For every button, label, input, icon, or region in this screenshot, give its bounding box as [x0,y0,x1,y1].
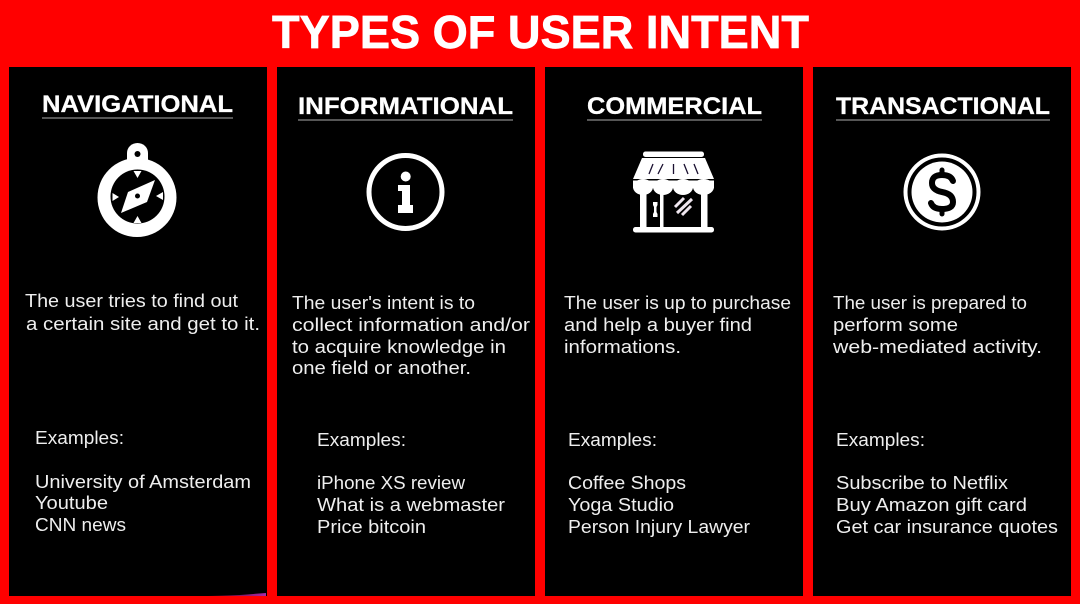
description: informational: collect information and/or [292,315,530,335]
examples: transactional: Get car insurance quotes [836,517,1058,537]
examples: informational: What is a webmaster [317,495,505,515]
icon: dollar coin [906,156,978,228]
examples: navigational [35,428,251,535]
icon: compass [98,143,176,237]
examples: informational: Price bitcoin [317,517,426,537]
description: commercial [564,293,791,357]
description: navigational [25,291,260,334]
examples: navigational: CNN news [35,515,126,535]
examples: commercial: Coffee Shops [568,473,686,493]
heading: informational: INFORMATIONAL [298,93,513,120]
examples: transactional [836,430,1058,537]
description: informational [292,293,530,378]
description: transactional: perform some [833,315,958,335]
panel: navigational [9,67,267,596]
examples: navigational: Examples: [35,428,124,448]
panel: informational [277,67,535,596]
description: transactional [832,293,1042,357]
examples: informational: Examples: [317,430,406,450]
description: commercial: informations. [564,337,681,357]
examples: navigational: University of Amsterdam [35,472,251,492]
examples: commercial [568,430,750,537]
examples: informational [317,430,505,537]
examples: commercial: Examples: [568,430,657,450]
description: informational: to acquire knowledge in [292,337,506,357]
examples: transactional: Buy Amazon gift card [836,495,1027,515]
heading: navigational: NAVIGATIONAL [42,91,233,118]
description: navigational: a certain site and get to it. [26,314,260,334]
icon: shop [633,152,714,232]
examples: navigational: Youtube [35,493,108,513]
examples: transactional: Subscribe to Netflix [836,473,1008,493]
examples: commercial: Yoga Studio [568,495,674,515]
description: transactional: web-mediated activity. [832,337,1042,357]
panel: commercial [545,67,803,596]
description: commercial: and help a buyer find [564,315,752,335]
description: navigational: The user tries to find out [25,291,238,311]
description: commercial: The user is up to purchase [564,293,791,313]
title: TYPES OF USER INTENT [272,6,809,58]
description: informational: one field or another. [292,358,471,378]
examples: informational: iPhone XS review [317,473,466,493]
heading: commercial: COMMERCIAL [587,93,762,120]
description: transactional: The user is prepared to [833,293,1027,313]
description: informational: The user's intent is to [292,293,475,313]
examples: commercial: Person Injury Lawyer [568,517,750,537]
examples: transactional: Examples: [836,430,925,450]
icon: info [369,156,442,228]
panel: transactional [813,67,1071,596]
heading: transactional: TRANSACTIONAL [836,93,1050,120]
